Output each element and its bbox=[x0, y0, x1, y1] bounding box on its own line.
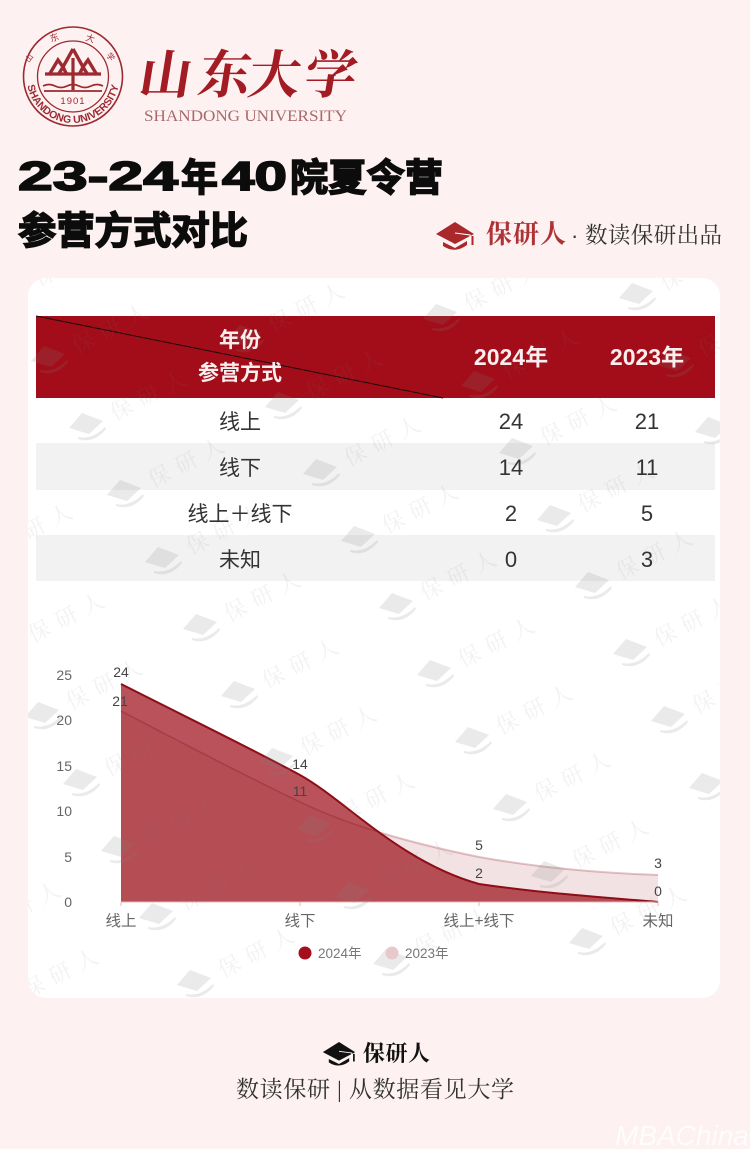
chart x axis labels: 未知 bbox=[642, 912, 674, 930]
chart y axis labels: 0 bbox=[64, 894, 72, 910]
watermark pattern: 保研人 bbox=[454, 609, 545, 672]
chart x axis labels: 线下 bbox=[284, 912, 316, 930]
title: 23-24 bbox=[18, 153, 178, 199]
chart data labels: 2 bbox=[475, 865, 483, 881]
chart legend: 2023年 bbox=[405, 946, 449, 961]
footer logo: 保研人 bbox=[363, 1041, 430, 1066]
chart data labels: 14 bbox=[292, 756, 308, 772]
watermark pattern: 保研人 bbox=[144, 429, 235, 492]
university name calligraphy: SHANDONG UNIVERSITY bbox=[144, 108, 347, 125]
table rows: 线上 bbox=[219, 411, 261, 434]
watermark pattern: 保研人 bbox=[18, 940, 109, 1003]
panel: white card bbox=[28, 278, 720, 998]
chart data labels: 0 bbox=[654, 883, 662, 899]
brand: 保研人 数读保研出品: 数读保研出品 bbox=[585, 223, 722, 248]
watermark pattern: 保研人 bbox=[340, 408, 431, 471]
table rows: 线下 bbox=[219, 457, 261, 480]
chart y axis labels: 25 bbox=[56, 667, 72, 683]
watermark pattern bbox=[28, 278, 720, 998]
table header text: 2023年 bbox=[610, 344, 684, 370]
watermark pattern: 保研人 bbox=[650, 588, 741, 651]
watermark pattern: 保研人 bbox=[416, 542, 507, 605]
watermark pattern: 保研人 bbox=[606, 877, 697, 940]
watermark pattern: 保研人 bbox=[182, 496, 273, 559]
watermark pattern: 保研人 bbox=[220, 563, 311, 626]
title: 年 bbox=[181, 158, 218, 200]
brand: 保研人 数读保研出品 bbox=[436, 220, 722, 250]
watermark pattern: 保研人 bbox=[612, 521, 703, 584]
table rows bbox=[188, 409, 659, 572]
table rows: 11 bbox=[636, 455, 658, 480]
watermark pattern: 保研人 bbox=[334, 764, 425, 827]
watermark pattern: 保研人 bbox=[62, 651, 153, 714]
table rows: 3 bbox=[641, 547, 653, 572]
table rows: 2 bbox=[505, 501, 517, 526]
chart data labels: 21 bbox=[112, 693, 128, 709]
university name calligraphy: 山东大学 bbox=[135, 47, 362, 105]
watermark pattern: 保研人 bbox=[24, 584, 115, 647]
chart y axis labels: 5 bbox=[64, 849, 72, 865]
table rows: 未知 bbox=[219, 549, 261, 572]
icon: Shandong University seal: 山 bbox=[22, 52, 35, 64]
chart y axis labels: 10 bbox=[56, 803, 72, 819]
watermark pattern: 保研人 bbox=[296, 697, 387, 760]
watermark pattern: 保研人 bbox=[100, 718, 191, 781]
table header text: 年份 bbox=[219, 329, 261, 352]
chart data labels: 3 bbox=[654, 855, 662, 871]
icon: Shandong University seal: 学 bbox=[104, 50, 117, 63]
icon: Shandong University seal: 东 bbox=[48, 31, 60, 44]
watermark pattern: 保研人 bbox=[530, 743, 621, 806]
chart y axis labels bbox=[56, 667, 72, 910]
brand: 保研人 数读保研出品: · bbox=[571, 223, 578, 248]
chart legend bbox=[298, 946, 449, 961]
table header text bbox=[198, 329, 684, 385]
chart data labels: 5 bbox=[475, 837, 483, 853]
table rows: 24 bbox=[499, 409, 523, 434]
chart y axis labels: 15 bbox=[56, 758, 72, 774]
chart data labels: 24 bbox=[113, 664, 129, 680]
watermark pattern: 保研人 bbox=[258, 630, 349, 693]
table header text: 2024年 bbox=[474, 344, 548, 370]
chart legend: 2024年 bbox=[318, 946, 362, 961]
watermark pattern: 保研人 bbox=[492, 676, 583, 739]
table rows: 14 bbox=[499, 455, 523, 480]
icon: Shandong University seal: 大 bbox=[84, 31, 96, 45]
chart areas bbox=[121, 684, 658, 906]
title bbox=[18, 153, 443, 253]
watermark pattern: 保研人 bbox=[214, 919, 305, 982]
icon: Shandong University seal bbox=[22, 26, 124, 127]
title: 参营方式对比 bbox=[18, 211, 248, 253]
footer tagline: 数读保研 | 从数据看见大学 bbox=[236, 1077, 514, 1102]
table header text: 参营方式 bbox=[198, 361, 282, 385]
table rows: 0 bbox=[505, 547, 517, 572]
watermark pattern: 保研人 bbox=[68, 295, 159, 358]
watermark pattern: 保研人 bbox=[568, 810, 659, 873]
table rows: 5 bbox=[641, 501, 653, 526]
watermark pattern: 保研人 bbox=[498, 320, 589, 383]
chart data labels bbox=[112, 664, 662, 899]
watermark pattern: 保研人 bbox=[30, 228, 121, 291]
chart y axis labels: 20 bbox=[56, 712, 72, 728]
watermark pattern: 保研人 bbox=[378, 475, 469, 538]
watermark pattern: 保研人 bbox=[410, 898, 501, 961]
table background bbox=[36, 316, 715, 581]
watermark pattern: 保研人 bbox=[138, 785, 229, 848]
title: 院夏令营 bbox=[290, 158, 443, 200]
watermark pattern: 保研人 bbox=[372, 831, 463, 894]
chart x axis labels bbox=[105, 912, 674, 930]
watermark pattern: 保研人 bbox=[302, 341, 393, 404]
watermark pattern: 保研人 bbox=[176, 852, 267, 915]
watermark pattern: 保研人 bbox=[656, 232, 747, 295]
watermark pattern: 保研人 bbox=[106, 362, 197, 425]
title: 40 bbox=[222, 153, 287, 199]
chart x axis labels: 线上 bbox=[105, 912, 137, 930]
brand: 保研人 数读保研出品: 保研人 bbox=[486, 220, 566, 249]
footer logo bbox=[323, 1041, 430, 1066]
icon: Shandong University seal: 1901 bbox=[60, 96, 86, 107]
watermark pattern: 保研人 bbox=[536, 387, 627, 450]
chart x axis labels: 线上+线下 bbox=[443, 912, 515, 930]
watermark pattern: 保研人 bbox=[460, 253, 551, 316]
watermark pattern: 保研人 bbox=[264, 274, 355, 337]
icon: Shandong University seal: SHANDONG UNIVERSITY bbox=[28, 84, 118, 123]
chart data labels: 11 bbox=[293, 783, 307, 799]
table rows: 21 bbox=[635, 409, 659, 434]
table rows: 线上＋线下 bbox=[188, 503, 292, 526]
watermark pattern: 保研人 bbox=[574, 454, 665, 517]
